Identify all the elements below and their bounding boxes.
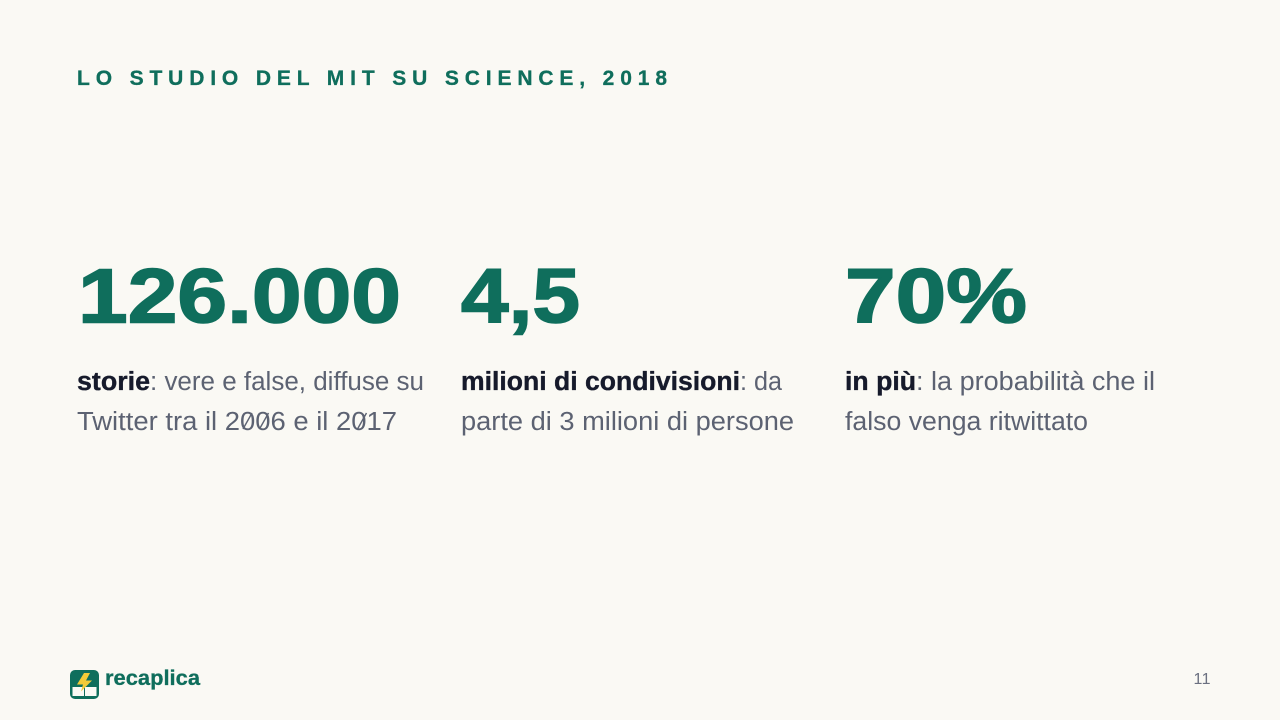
description: retweet probability: in più [845, 368, 916, 396]
logo: recaplica [70, 666, 201, 699]
title: LO STUDIO DEL MIT SU SCIENCE, 2018 [77, 67, 667, 90]
number: 126.000: 126.000 [78, 254, 401, 340]
description: stories: storie [77, 368, 150, 396]
panel: retweet probability statistic [845, 254, 1155, 436]
description: shares: parte di 3 milioni di persone [461, 408, 794, 436]
page number: 11 [1194, 671, 1211, 688]
icon: book with lightning bolt [70, 670, 99, 699]
panel: shares statistic [461, 254, 794, 436]
description: stories: Twitter tra il 2006 e il 2017 [77, 408, 397, 436]
description: shares: : da [740, 368, 783, 396]
description: stories [77, 368, 424, 436]
wordmark: recaplica [105, 666, 201, 690]
description: stories: : vere e false, diffuse su [150, 368, 424, 396]
description: retweet probability [845, 368, 1155, 436]
description: retweet probability: falso venga ritwittato [845, 408, 1088, 436]
description: retweet probability: : la probabilità che il [916, 368, 1155, 396]
description: shares [461, 368, 794, 436]
description: shares: milioni di condivisioni [461, 368, 740, 396]
number: 4,5: 4,5 [461, 254, 580, 340]
panel: stories statistic [77, 254, 424, 436]
number: 70%: 70% [845, 254, 1027, 340]
